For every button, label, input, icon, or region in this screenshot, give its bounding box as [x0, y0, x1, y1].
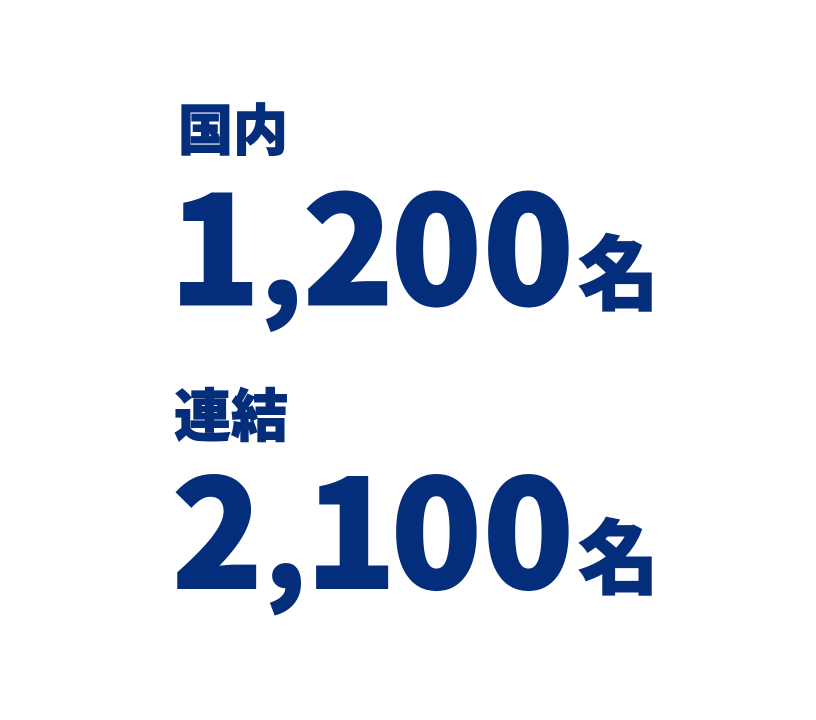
number: 1,200: 1: [170, 132, 260, 348]
number: 2,100: ,: [265, 454, 306, 622]
number: 1,200: ,: [261, 170, 302, 338]
unit: people: 名: [578, 232, 659, 322]
number: 1,200: 0: [391, 132, 482, 348]
label: consolidated: 連結: [174, 385, 288, 449]
unit: people: 名: [578, 516, 659, 606]
number: 2,100: 0: [483, 415, 574, 631]
number: 2,100: 2: [172, 415, 263, 631]
number: 1,200: 0: [483, 132, 574, 348]
number: 2,100: 0: [391, 415, 482, 631]
group: domestic headcount: [170, 100, 659, 348]
number: 1,200: 2: [303, 132, 394, 348]
label: domestic: 国内: [178, 100, 288, 162]
number: 2,100: 1: [306, 415, 396, 631]
group: consolidated headcount: [172, 385, 659, 631]
